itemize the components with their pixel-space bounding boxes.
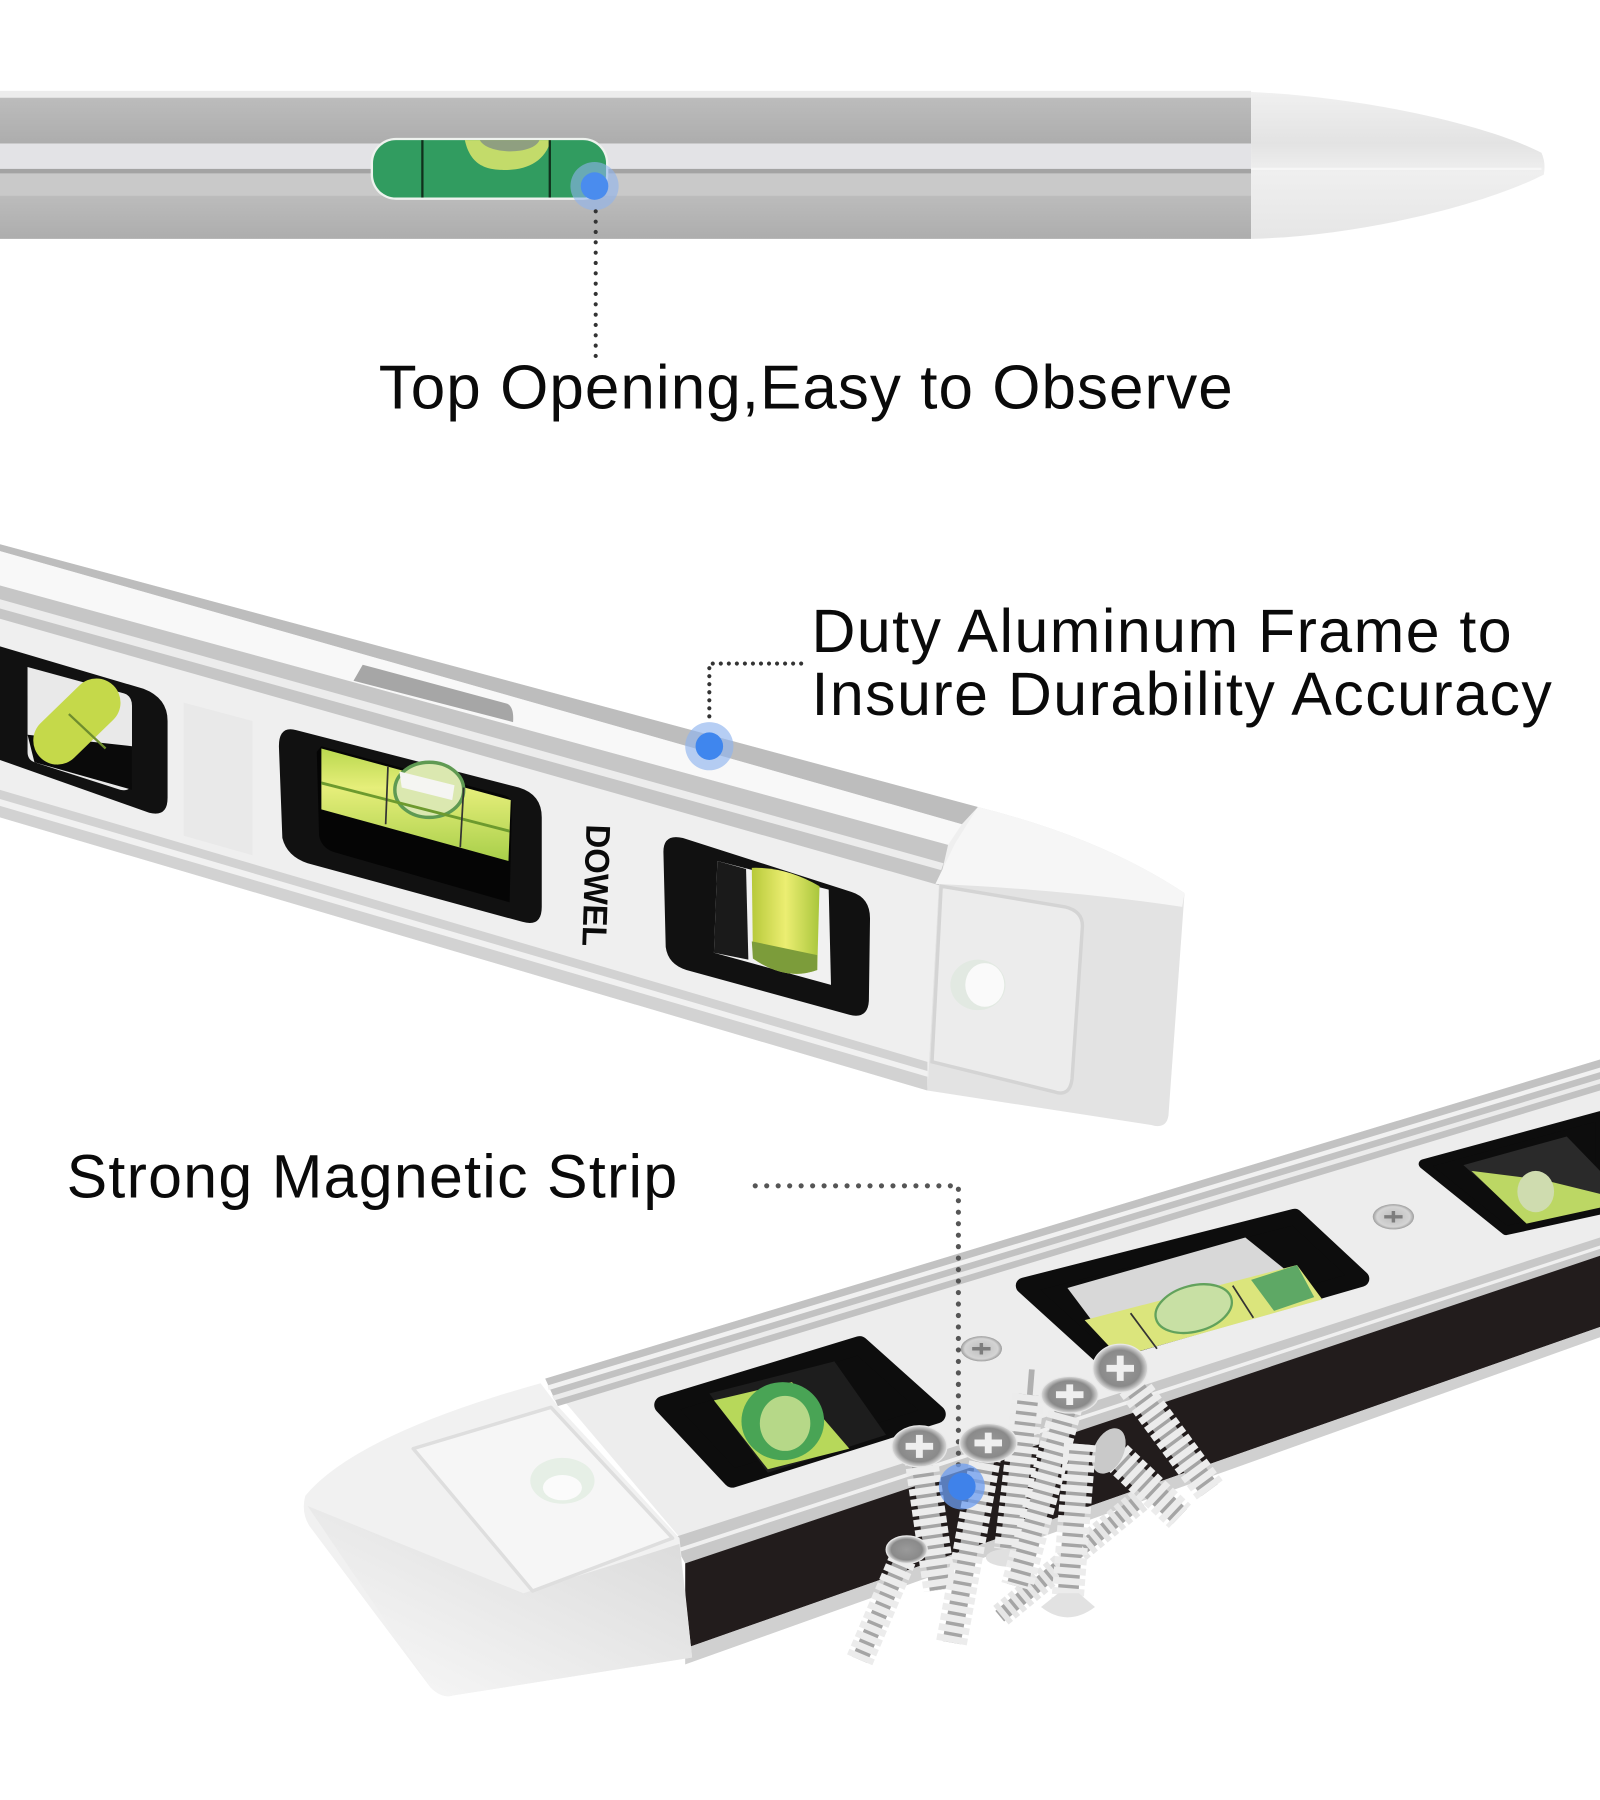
vial window right bbox=[1423, 1116, 1600, 1231]
screws bbox=[860, 1344, 1210, 1660]
screw: second upright bbox=[952, 1443, 988, 1643]
screw: head down bbox=[986, 1369, 1034, 1567]
end cap bbox=[304, 1383, 692, 1696]
small screw heads on body bbox=[961, 1204, 1414, 1361]
vial window front bbox=[663, 1345, 937, 1478]
panel: top view of level bbox=[0, 91, 1545, 358]
callout marker: aluminum frame bbox=[685, 664, 801, 770]
vial window center bbox=[279, 729, 542, 923]
brand logo: DOWEL bbox=[574, 824, 616, 947]
callout marker: top opening bbox=[570, 162, 619, 358]
screw heads bbox=[886, 1344, 1148, 1563]
label: top opening: Top Opening,Easy to Observe bbox=[379, 354, 1233, 423]
vial window left bbox=[0, 646, 168, 814]
callout line: magnetic strip bbox=[755, 1186, 958, 1467]
vial window bbox=[371, 138, 608, 200]
screw: head right bbox=[1085, 1423, 1180, 1516]
screw: center upright bbox=[1041, 1444, 1095, 1617]
magnetic strip bbox=[671, 1237, 1600, 1664]
plastic end cap bbox=[1251, 92, 1545, 239]
screw: lower shaft bbox=[1017, 1395, 1070, 1586]
label: aluminum frame: Duty Aluminum Frame to bbox=[811, 597, 1512, 665]
screw: small left bbox=[860, 1550, 907, 1660]
aluminum frame bbox=[0, 544, 978, 1091]
vial window middle bbox=[1024, 1217, 1361, 1357]
aluminum body bbox=[0, 91, 1251, 239]
face textured panel bbox=[184, 703, 253, 855]
screw: crosswise bbox=[1000, 1500, 1140, 1616]
label: aluminum frame: Insure Durability Accuracy bbox=[811, 660, 1552, 728]
screw: right diagonal bbox=[1120, 1368, 1210, 1490]
end cap bbox=[927, 807, 1185, 1126]
callout marker: magnetic strip bbox=[939, 1464, 985, 1509]
vial window right bbox=[663, 837, 870, 1016]
panel: bottom view of level with magnetic strip bbox=[304, 1060, 1600, 1696]
spirit slot on top bbox=[354, 665, 513, 722]
screw: left upright bbox=[919, 1446, 940, 1590]
aluminum body bbox=[545, 1060, 1600, 1664]
label: aluminum frame bbox=[811, 597, 1552, 728]
panel: front view of level bbox=[0, 544, 1185, 1126]
label: magnetic strip: Strong Magnetic Strip bbox=[67, 1142, 677, 1210]
